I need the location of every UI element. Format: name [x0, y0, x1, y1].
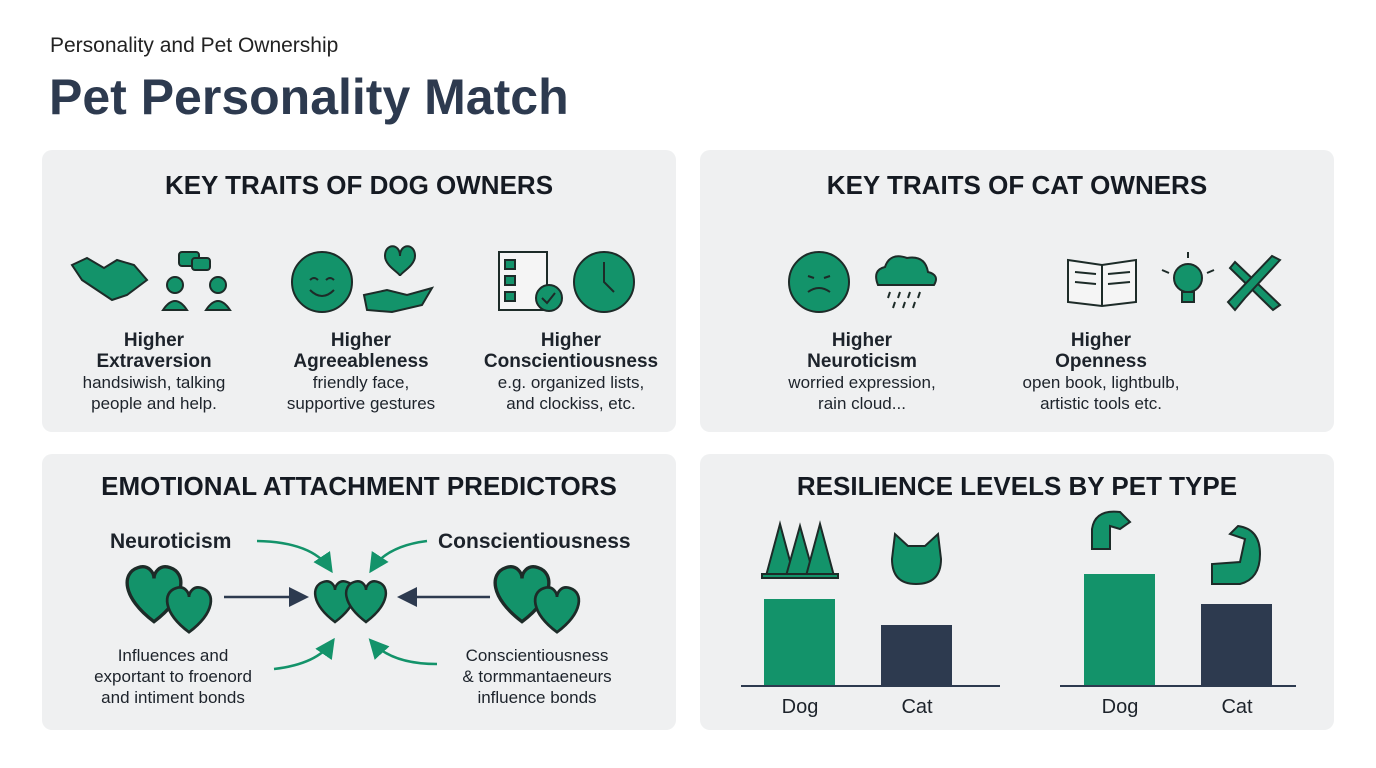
heading: KEY TRAITS OF CAT OWNERS	[827, 170, 1207, 200]
text: conscientiousness: and clockiss, etc.	[506, 394, 636, 413]
text: conscientiousness: Higher	[541, 330, 601, 351]
text: openness	[1023, 330, 1179, 413]
text: neuroticism note: and intiment bonds	[101, 688, 245, 707]
text: conscientiousness	[484, 330, 658, 413]
text: conscientiousness note: influence bonds	[477, 688, 597, 707]
label: conscientiousness: Conscientiousness	[438, 530, 631, 553]
heading: EMOTIONAL ATTACHMENT PREDICTORS	[101, 471, 617, 501]
text: neuroticism note: Influences and	[118, 646, 228, 665]
text: neuroticism note: exportant to froenord	[94, 667, 252, 686]
text: extraversion: handsiwish, talking	[83, 373, 225, 392]
bar chart	[741, 510, 1296, 718]
panel: emotional attachment	[42, 454, 676, 730]
icons: dog traits	[70, 245, 635, 313]
text: openness: Higher	[1071, 330, 1131, 351]
text: agreeableness: Higher	[331, 330, 391, 351]
text: conscientiousness note	[462, 646, 612, 707]
text: agreeableness	[287, 330, 435, 413]
text: conscientiousness: e.g. organized lists,	[498, 373, 644, 392]
text: agreeableness: supportive gestures	[287, 394, 435, 413]
text: agreeableness: Agreeableness	[293, 351, 429, 372]
label: cat 2: Cat	[1221, 696, 1253, 718]
panel: cat owners	[700, 150, 1334, 432]
text: extraversion: Higher	[124, 330, 184, 351]
text: openness: Openness	[1055, 351, 1147, 372]
label: dog 1: Dog	[782, 696, 818, 718]
text: neuroticism: worried expression,	[788, 373, 936, 392]
text: neuroticism: rain cloud...	[818, 394, 906, 413]
text: neuroticism	[788, 330, 936, 413]
text: extraversion	[83, 330, 225, 413]
text: extraversion: people and help.	[91, 394, 217, 413]
text: extraversion: Extraversion	[96, 351, 212, 372]
text: conscientiousness note: Conscientiousness	[466, 646, 608, 665]
diagram: hearts and arrows	[125, 540, 580, 670]
title: Pet Personality Match	[49, 69, 569, 125]
text: openness: artistic tools etc.	[1040, 394, 1162, 413]
text: neuroticism: Neuroticism	[807, 351, 917, 372]
text: conscientiousness: Conscientiousness	[484, 351, 658, 372]
text: neuroticism: Higher	[832, 330, 892, 351]
label: dog 2: Dog	[1102, 696, 1138, 718]
label: neuroticism: Neuroticism	[110, 530, 231, 553]
text: openness: open book, lightbulb,	[1023, 373, 1179, 392]
panel: dog owners	[42, 150, 676, 432]
text: neuroticism note	[94, 646, 252, 707]
text: conscientiousness note: & tormmantaeneurs	[462, 667, 612, 686]
subtitle: Personality and Pet Ownership	[50, 34, 338, 57]
panel: resilience chart	[700, 454, 1334, 730]
heading: RESILIENCE LEVELS BY PET TYPE	[797, 471, 1237, 501]
icons: cat traits	[788, 251, 1282, 313]
text: agreeableness: friendly face,	[313, 373, 409, 392]
heading: KEY TRAITS OF DOG OWNERS	[165, 170, 553, 200]
label: cat 1: Cat	[901, 696, 933, 718]
